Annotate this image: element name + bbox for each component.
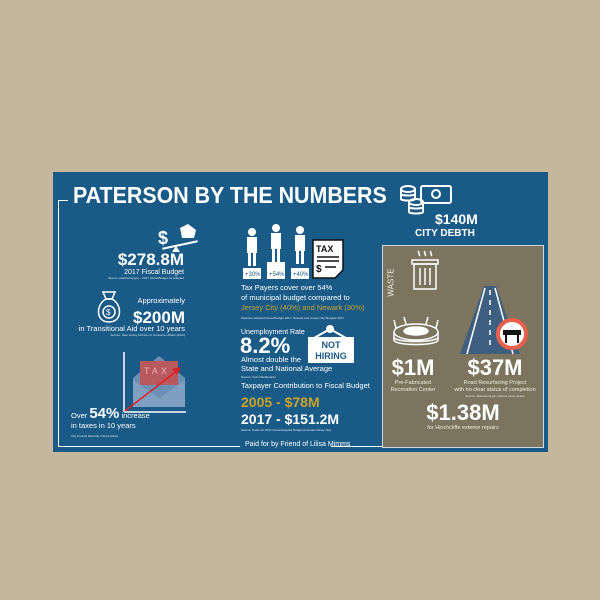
- text: tax payers: Tax Payers cover over 54%: [241, 283, 332, 292]
- icon: money bag: [98, 291, 120, 323]
- text: 8.2%: [240, 333, 290, 358]
- icon: not hiring sign: NOT: [322, 340, 341, 350]
- text: 54% increase: Over 54% increase: [71, 405, 150, 422]
- text: $1M: Pre-Fabricated: [395, 380, 431, 386]
- text: Almost double the: [241, 355, 301, 364]
- text: $37M: [454, 355, 536, 398]
- text: city debt: $140M: [435, 211, 478, 227]
- chart: tax envelope: [123, 352, 186, 413]
- text: $37M: Source: Patersonnj.gov various news outlets: [465, 394, 525, 398]
- text: tax payers: Paterson Adopted Fiscal Budget 2017, Newark and Jersey City Budgets 2017: [241, 316, 344, 320]
- icon: people on podiums: [243, 224, 309, 279]
- text: transitional aid: Approximately: [137, 296, 185, 305]
- text: 2005 - $78M: [241, 394, 320, 410]
- text: 2017 - $151.2M: [241, 411, 339, 427]
- text: tax payers: Jersey City (40%) and Newark (30%): [241, 303, 364, 312]
- text: fiscal budget: [108, 250, 184, 280]
- text: $1M: Recreation Center: [391, 387, 435, 393]
- icon: people on podiums: +40%: [293, 272, 309, 278]
- text: unemployment: Unemployment Rate: [241, 329, 305, 336]
- text: 54% increase: City Council Records / News Article: [71, 434, 118, 438]
- text: $37M: with no clear status of completion: [454, 387, 536, 393]
- text: transitional aid: $200M: [133, 308, 185, 327]
- text: waste label: WASTE: [387, 268, 396, 297]
- text: tax payers: [241, 283, 364, 320]
- text: $37M: Road Resurfacing Project: [464, 380, 526, 386]
- text: Source: New Jersey Division of Consumer Affairs (DCA): [111, 333, 185, 337]
- text: $1.38M: for Hinchcliffe exterior repairs: [427, 425, 499, 431]
- icon: tax document: TAX: [316, 244, 333, 254]
- text: Source: Paterson 2017 Fiscal Adopted Budget (Includes library Tax): [241, 428, 331, 432]
- chart: tax envelope: TAX: [144, 366, 170, 376]
- panel: main blue: [53, 172, 548, 452]
- text: fiscal budget: $278.8M: [118, 250, 184, 269]
- text: in Transitional Aid over 10 years: [79, 324, 185, 333]
- icon: people on podiums: +54%: [269, 272, 285, 278]
- icon: money bag: $: [106, 308, 111, 317]
- text: fiscal budget: 2017 Fiscal Budget: [124, 269, 184, 276]
- icon: money debt: [400, 185, 452, 214]
- text: transitional aid: [133, 296, 185, 327]
- text: 54% increase: [71, 405, 150, 438]
- text: CITY DEBTH: [415, 228, 475, 239]
- icon: road with barrier: [460, 286, 528, 354]
- text: Source: Civic Dashboards: [241, 375, 276, 379]
- text: tax payers: of municipal budget compared to: [241, 293, 350, 302]
- icon: trash can: [411, 250, 439, 290]
- text: $1M: $1M: [392, 355, 434, 380]
- icon: not hiring sign: [308, 325, 354, 363]
- text: State and National Average: [241, 364, 332, 372]
- icon: tax document: $: [316, 264, 322, 275]
- icon: not hiring sign: HIRING: [315, 351, 347, 361]
- icon: budget seesaw: [158, 224, 198, 252]
- text: 54% increase: in taxes in 10 years: [71, 421, 136, 430]
- icon: budget seesaw: $: [158, 228, 168, 248]
- text: $1M: [391, 355, 436, 393]
- icon: stadium: [393, 316, 439, 346]
- text: $1.38M: $1.38M: [426, 400, 500, 425]
- frame lines: [58, 200, 68, 201]
- text: fiscal budget: Source: patersonnj.gov – 2017 Fiscal Budget As Adopted: [108, 276, 184, 280]
- panel: olive projects: [382, 245, 544, 448]
- icon: tax document: [312, 239, 344, 279]
- text: $37M: $37M: [467, 355, 523, 380]
- text: taxpayer contribution: Taxpayer Contribution to Fiscal Budget: [241, 381, 370, 390]
- footer credit: Paid for by Friend of Lilisa Mimms: [245, 441, 350, 448]
- title: PATERSON BY THE NUMBERS: [73, 182, 387, 208]
- icon: people on podiums: +30%: [245, 272, 261, 278]
